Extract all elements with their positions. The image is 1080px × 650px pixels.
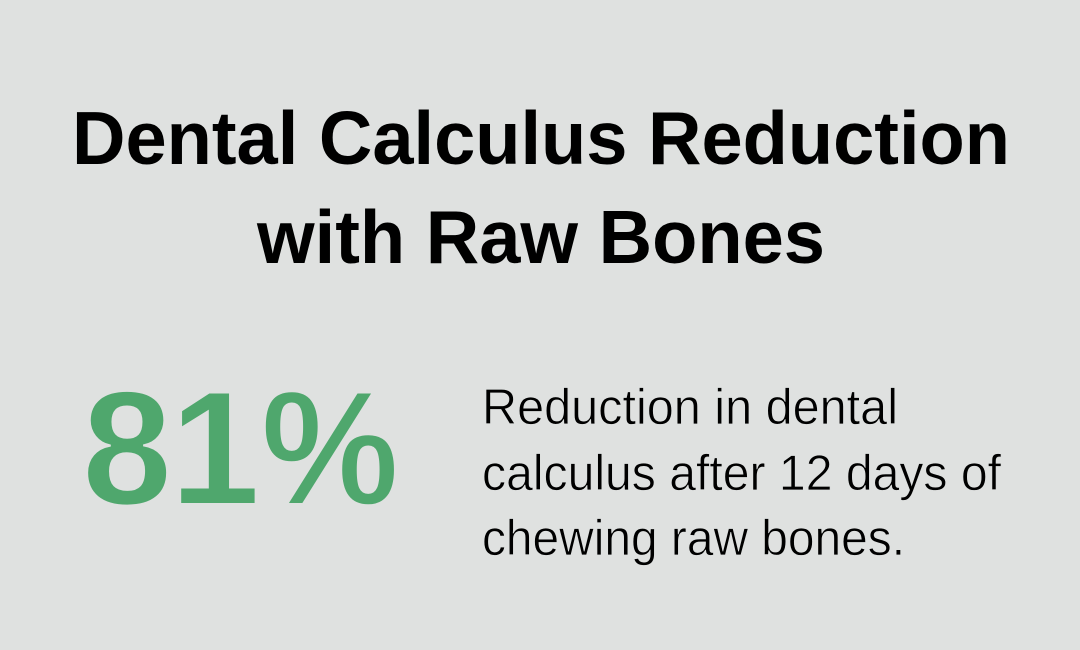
statistic: 81%: [82, 358, 399, 539]
description text: chewing raw bones.: [482, 510, 905, 566]
statistic: 81%: %: [261, 358, 399, 539]
description text: Reduction in dental: [482, 379, 898, 435]
description text: [482, 379, 1001, 566]
statistic: 81%: 1: [170, 358, 260, 539]
title: with Raw Bones: [256, 195, 825, 279]
title: [72, 96, 1010, 279]
title: Dental Calculus Reduction: [72, 96, 1010, 180]
description text: calculus after 12 days of: [482, 445, 1001, 501]
statistic: 81%: 8: [82, 358, 172, 539]
